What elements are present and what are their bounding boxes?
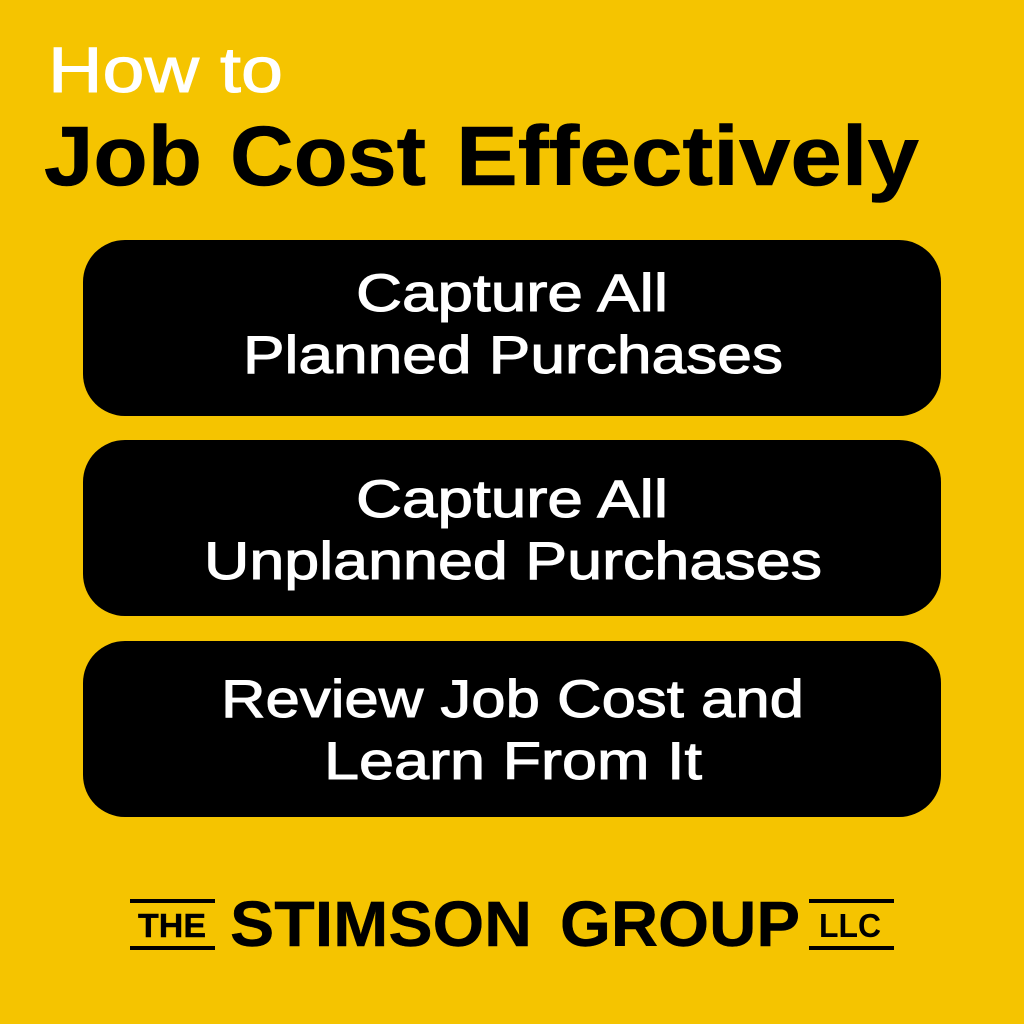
title line: Job Cost Effectively: Cost [230,109,426,203]
title line: How to: How to [48,34,283,106]
panel: review job cost [83,641,941,817]
logo: THE [130,899,215,950]
logo: LLC: LLC [819,907,881,944]
title line: Job Cost Effectively [44,109,919,203]
title line: Job Cost Effectively: Effectively [456,109,919,203]
title line: Job Cost Effectively: Job [44,109,202,203]
logo: LLC [809,899,894,950]
logo: The Stimson Group LLC [130,888,894,960]
panel: capture unplanned purchases: Unplanned Purchases [204,532,822,591]
logo: STIMSON GROUP: GROUP [560,888,800,960]
title [44,34,919,203]
panel: review job cost: Review Job Cost and [221,670,804,729]
panel: capture unplanned purchases [83,440,941,616]
panel: capture planned purchases [83,240,941,416]
panel: capture planned purchases: Planned Purchases [243,326,783,385]
panel: review job cost: Learn From It [324,732,702,791]
logo: THE: THE [138,907,206,944]
logo: STIMSON GROUP [230,888,800,960]
panel: capture unplanned purchases: Capture All [356,470,668,529]
panel: capture planned purchases: Capture All [356,264,668,323]
logo: STIMSON GROUP: STIMSON [230,888,532,960]
